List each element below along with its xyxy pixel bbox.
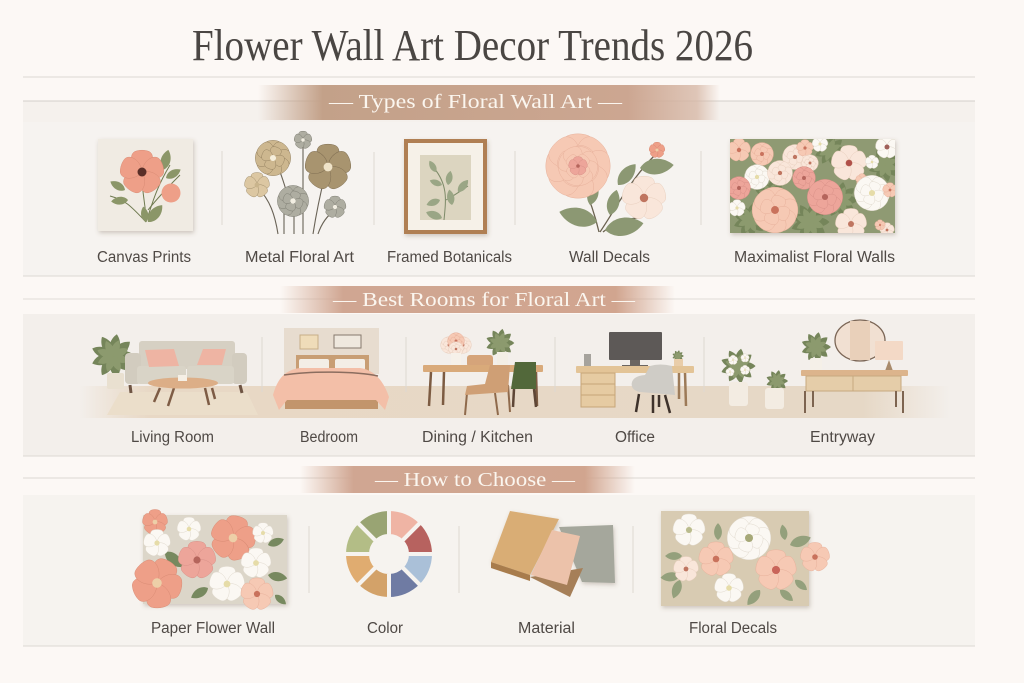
label: metal floral art: Metal Floral Art [245, 249, 355, 266]
item: dining and kitchen [423, 328, 543, 415]
item: framed botanical [404, 139, 487, 234]
item: living room [90, 333, 258, 415]
panel: best rooms for floral art [23, 286, 975, 456]
item: floral decals [660, 511, 831, 608]
floor band [80, 386, 950, 418]
item: metal floral art [243, 131, 353, 234]
title: Flower Wall Art Decor Trends 2026 [192, 21, 753, 70]
item: bedroom [273, 328, 389, 410]
label: living room: Living Room [131, 429, 214, 446]
label: office: Office [615, 429, 655, 446]
item: maximalist floral wall [729, 139, 898, 237]
label: bedroom: Bedroom [300, 429, 358, 446]
item: paper flower wall [120, 510, 288, 620]
label: maximalist floral walls: Maximalist Floral Walls [734, 249, 895, 266]
label: dining / kitchen: Dining / Kitchen [422, 429, 533, 446]
label: material: Material [518, 620, 575, 637]
label: framed botanicals: Framed Botanicals [387, 249, 512, 266]
panel: how to choose [23, 466, 975, 646]
item: wall decals [544, 132, 674, 239]
label: wall decals: Wall Decals [569, 249, 650, 266]
label: paper flower wall: Paper Flower Wall [151, 620, 275, 637]
heading banner: how to choose: — How to Choose — [374, 469, 576, 491]
item: office [576, 332, 694, 413]
heading banner: rooms: — Best Rooms for Floral Art — [332, 289, 636, 311]
chart: color wheel [344, 509, 434, 599]
label: color: Color [367, 620, 403, 637]
item: material samples [491, 511, 615, 597]
heading banner: rooms [280, 286, 675, 313]
panel: types of floral wall art [23, 85, 975, 276]
label: entryway: Entryway [810, 429, 875, 446]
heading banner: types [258, 85, 720, 120]
label: canvas prints: Canvas Prints [97, 249, 191, 266]
item: entryway [720, 320, 908, 413]
heading banner: types: — Types of Floral Wall Art — [328, 91, 623, 113]
label: floral decals: Floral Decals [689, 620, 777, 637]
heading banner: how to choose [300, 466, 635, 493]
item: canvas print [98, 139, 193, 231]
